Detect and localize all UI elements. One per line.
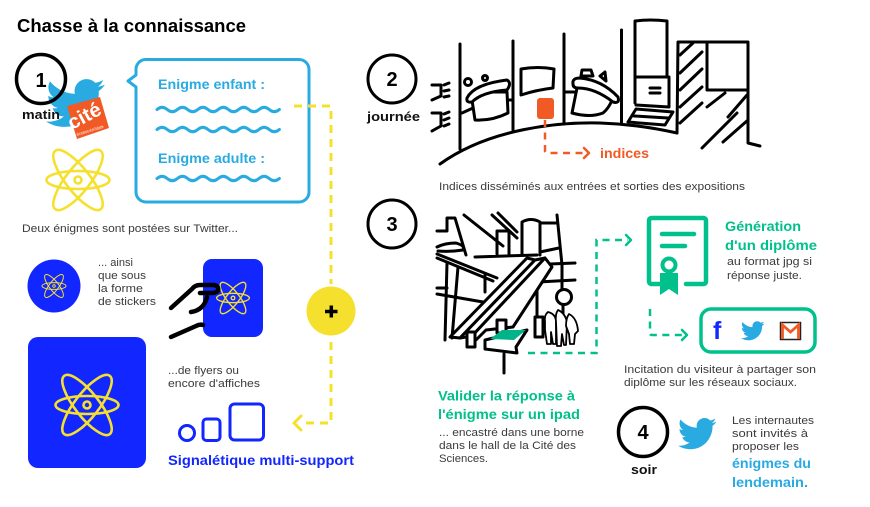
caption: diploma format: [727, 256, 812, 282]
icon: diploma: [649, 218, 706, 295]
tall kiosk: [635, 20, 667, 103]
hatched building: [677, 42, 760, 146]
flyer: large blue card: [28, 337, 146, 468]
icon: twitter bird with Cité logo: des sciences et de l'industrie: [76, 124, 104, 137]
visitors: [545, 310, 578, 346]
caption: clue placement: Indices disséminés aux entrées et sorties des expositions: [439, 181, 746, 193]
heading: validate on iPad: Valider la réponse à: [438, 388, 575, 404]
frame on wall: [521, 68, 554, 95]
caption: internet users: [732, 415, 815, 453]
icon: gmail: [780, 322, 800, 340]
sticker: round blue: [28, 260, 80, 312]
icon: twitter bird with Cité logo: cité: [64, 99, 105, 134]
caption: Twitter riddles: Deux énigmes sont postées sur Twitter...: [22, 223, 238, 235]
caption: stickers: ... ainsi: [98, 257, 133, 269]
right pot: [572, 82, 612, 116]
caption: flyers: ...de flyers ou: [168, 365, 239, 377]
heading: diploma generation: Génération: [725, 218, 801, 234]
arrow: clue: [545, 120, 589, 158]
heading: multi-support signage: Signalétique multi-support: [168, 452, 354, 468]
label: matin: matin: [22, 108, 60, 122]
caption: iPad kiosk: dans le hall de la Cité des: [439, 440, 577, 452]
icon: twitter bird: [678, 418, 716, 449]
step number 4: 4: [637, 422, 649, 444]
caption: diploma format: réponse juste.: [727, 270, 802, 282]
heading: validate on iPad: [438, 388, 580, 422]
icon: facebook: f: [713, 317, 722, 345]
highlight: riddles of the next day: [732, 455, 811, 490]
icon: yellow atom: [46, 143, 110, 217]
step number 2: [368, 55, 416, 103]
caption: stickers: [98, 257, 157, 308]
caption: share incentive: [624, 364, 816, 389]
caption: stickers: que sous: [98, 270, 147, 282]
left pot: [472, 92, 508, 120]
caption: diploma format: au format jpg si: [727, 256, 812, 268]
hand holding blue card: [171, 259, 263, 337]
small signs: [432, 83, 449, 100]
icon: twitter bird with Cité logo: [46, 79, 109, 139]
upper structure: [437, 213, 517, 255]
caption: share incentive: Incitation du visiteur à partager son: [624, 364, 816, 376]
illustration: exhibition hall: [432, 20, 760, 164]
lamp: [562, 264, 563, 316]
step number 4: [618, 408, 668, 456]
caption: internet users: sont invités à: [732, 428, 809, 440]
step number 2: 2: [386, 69, 398, 91]
icon: multi-support shapes: [180, 404, 264, 440]
speech bubble: riddles: [128, 60, 309, 202]
caption: stickers: la forme: [98, 283, 143, 295]
clue marker: [537, 98, 554, 119]
caption: stickers: de stickers: [98, 296, 157, 308]
heading: diploma generation: d'un diplôme: [725, 237, 817, 253]
title: Chasse à la connaissance: [17, 16, 246, 36]
caption: share incentive: diplôme sur les réseaux sociaux.: [624, 377, 797, 389]
heading: validate on iPad: l'énigme sur un ipad: [438, 406, 580, 422]
caption: iPad kiosk: ... encastré dans une borne: [439, 427, 584, 439]
walls and floor curve: [460, 30, 622, 149]
kiosk: [485, 330, 527, 353]
illustration: escalators and iPad kiosk: [437, 213, 578, 373]
step number 1: 1: [35, 70, 47, 92]
arrow: yellow dashed connector: [294, 106, 331, 430]
icon: twitter: [741, 321, 765, 340]
plus badge: [306, 286, 356, 336]
label: soir: soir: [631, 463, 657, 477]
step number 3: [368, 200, 416, 248]
speech bubble: riddles: Enigme adulte :: [158, 150, 265, 166]
caption: iPad kiosk: [439, 427, 584, 465]
arrow: green dashed to diploma: [528, 235, 631, 353]
caption: flyers: encore d'affiches: [168, 378, 261, 390]
caption: iPad kiosk: Sciences.: [439, 453, 488, 465]
panel: social networks: [701, 309, 815, 352]
arrow: diploma to social networks: [650, 309, 687, 340]
highlight: riddles of the next day: lendemain.: [732, 474, 808, 490]
caption: internet users: proposer les: [732, 441, 800, 453]
escalator bands: [450, 258, 535, 338]
speech bubble: riddles: Enigme enfant :: [158, 76, 265, 92]
label: journée: journée: [366, 110, 420, 124]
highlight: riddles of the next day: énigmes du: [732, 455, 811, 471]
heading: diploma generation: [725, 218, 817, 253]
caption: internet users: Les internautes: [732, 415, 815, 427]
caption: flyers: [168, 365, 261, 390]
step 1: morning badge and logos: [16, 54, 109, 139]
step number 3: 3: [386, 214, 398, 236]
label: indices: indices: [600, 145, 649, 161]
